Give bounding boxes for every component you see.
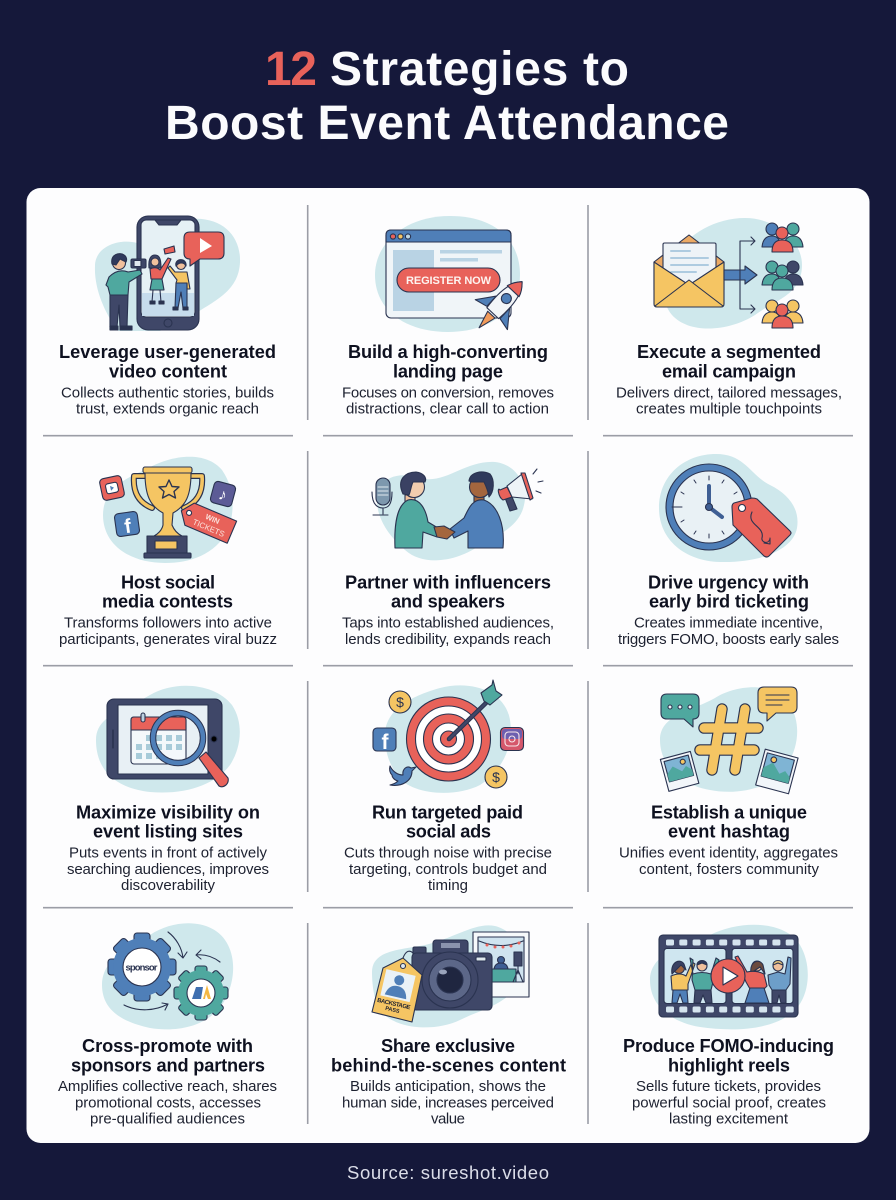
description: Sells future tickets, provides (636, 1078, 821, 1095)
heading (651, 802, 807, 842)
heading (102, 572, 233, 612)
description (342, 615, 554, 648)
icon: sponsor and partner gears: sponsor (126, 962, 158, 974)
description: Unifies event identity, aggregates (619, 845, 838, 862)
description: powerful social proof, creates (632, 1094, 826, 1111)
description: distractions, clear call to action (346, 400, 549, 417)
description (342, 1078, 554, 1127)
heading: Produce FOMO-inducing (623, 1036, 834, 1056)
description: Creates immediate incentive, (634, 615, 823, 632)
icon: hashtag with chat bubbles and photos (660, 687, 798, 794)
heading: Cross-promote with (82, 1036, 253, 1056)
heading: event listing sites (93, 822, 243, 842)
description: Collects authentic stories, builds (61, 384, 274, 401)
panel: behind-the-scenes (331, 925, 566, 1127)
icon: trophy with social tiles and tag: ♪ (217, 486, 229, 505)
description (342, 384, 554, 417)
heading (71, 1036, 265, 1076)
title: 12 (265, 43, 317, 96)
heading (345, 572, 551, 612)
panel: landing page (342, 216, 554, 417)
heading: video content (109, 362, 227, 382)
description: participants, generates viral buzz (59, 631, 277, 648)
icon: phone with creators and play bubble (95, 216, 240, 331)
heading: highlight reels (668, 1056, 790, 1076)
description: Cuts through noise with precise (344, 845, 552, 862)
icon: trophy with social tiles and tag: WIN (204, 512, 221, 526)
heading (76, 802, 260, 842)
heading (637, 342, 821, 382)
description: Delivers direct, tailored messages, (616, 384, 842, 401)
description: promotional costs, accesses (75, 1094, 261, 1111)
title: Strategies to (330, 43, 629, 96)
description: Puts events in front of actively (69, 845, 268, 862)
heading: Partner with influencers (345, 572, 551, 592)
heading: Maximize visibility on (76, 802, 260, 822)
description: triggers FOMO, boosts early sales (618, 631, 839, 648)
left speaker (395, 472, 438, 548)
description: lends credibility, expands reach (345, 631, 551, 648)
description: discoverability (121, 877, 216, 894)
icon: trophy with social tiles and tag (99, 457, 237, 563)
heading: Leverage user-generated (59, 342, 276, 362)
description: Transforms followers into active (64, 615, 272, 632)
icon: browser with register button and rocket (375, 216, 538, 343)
description: value (431, 1110, 465, 1127)
panel: highlight reels (623, 925, 834, 1127)
icon: camera, backstage pass and photo: BACKSTAGE (376, 998, 411, 1011)
heading: email campaign (662, 362, 796, 382)
right speaker (450, 472, 503, 548)
heading: media contests (102, 592, 233, 612)
heading: behind-the-scenes content (331, 1056, 566, 1076)
title: Boost Event Attendance (165, 97, 729, 150)
description: Focuses on conversion, removes (342, 384, 554, 401)
panel: social contests (59, 457, 277, 648)
description (344, 845, 552, 894)
icon: film strip with crowd and play button (650, 925, 808, 1029)
heading (59, 342, 276, 382)
source credit: Source: sureshot.video (347, 1162, 549, 1183)
icon: camera, backstage pass and photo (372, 925, 529, 1027)
description: trust, extends organic reach (76, 400, 259, 417)
icon: tablet calendar with magnifier (96, 686, 240, 793)
description: Taps into established audiences, (342, 615, 554, 632)
heading: Host social (121, 572, 215, 592)
description (61, 384, 274, 417)
heading: landing page (393, 362, 503, 382)
description (59, 615, 277, 648)
icon: trophy with social tiles and tag: f (123, 515, 133, 538)
description: timing (428, 877, 468, 894)
heading: social ads (406, 822, 491, 842)
heading (648, 572, 809, 612)
icon: camera, backstage pass and photo: PASS (384, 1006, 400, 1015)
icon: trophy with social tiles and tag: TICKETS (191, 517, 226, 539)
heading: Execute a segmented (637, 342, 821, 362)
description: pre-qualified audiences (90, 1110, 245, 1127)
heading: Run targeted paid (372, 802, 523, 822)
description: lasting excitement (669, 1110, 789, 1127)
icon: browser with register button and rocket: REGISTER NOW (406, 275, 492, 287)
heading: sponsors and partners (71, 1056, 265, 1076)
boy (168, 260, 190, 310)
icon: target with arrow, coins and social tiles: $ (492, 769, 500, 785)
title (165, 43, 729, 150)
audience groups (762, 223, 803, 328)
white panel background (26, 188, 870, 1143)
description: targeting, controls budget and (349, 861, 547, 878)
woman (149, 246, 175, 304)
description (58, 1078, 277, 1127)
description (67, 845, 269, 894)
panel: early bird (618, 454, 839, 648)
description (632, 1078, 826, 1127)
heading: Build a high-converting (348, 342, 548, 362)
heading: Drive urgency with (648, 572, 809, 592)
icon: handshake between speakers with mic and megaphone (372, 462, 543, 560)
description: Amplifies collective reach, shares (58, 1078, 277, 1095)
description (618, 615, 839, 648)
description (616, 384, 842, 417)
icon: target with arrow, coins and social tiles (373, 680, 524, 793)
icon: clock and price tag (659, 454, 798, 562)
panel: paid social ads (344, 680, 552, 894)
description: human side, increases perceived (342, 1094, 554, 1111)
heading: Share exclusive (381, 1036, 515, 1056)
icon: envelope sending to audience groups (654, 218, 803, 329)
man filming (106, 254, 146, 330)
description: Builds anticipation, shows the (350, 1078, 546, 1095)
panel: sponsors and partners (58, 923, 277, 1127)
icon: target with arrow, coins and social tiles: $ (396, 694, 404, 710)
icon: sponsor and partner gears (102, 923, 233, 1029)
heading (348, 342, 548, 382)
heading: event hashtag (668, 822, 790, 842)
panel: influencers and speakers (342, 462, 554, 648)
description: creates multiple touchpoints (636, 400, 822, 417)
heading: and speakers (391, 592, 505, 612)
description: searching audiences, improves (67, 861, 269, 878)
heading: Establish a unique (651, 802, 807, 822)
heading (372, 802, 523, 842)
icon: target with arrow, coins and social tiles: f (382, 731, 390, 754)
panel: segmented email (616, 218, 842, 417)
heading (623, 1036, 834, 1076)
heading: early bird ticketing (649, 592, 809, 612)
panel: event listing sites (67, 686, 269, 894)
panel: user-generated video (59, 216, 276, 417)
description (619, 845, 838, 878)
panel: event hashtag (619, 687, 838, 878)
description: content, fosters community (639, 861, 820, 878)
heading (331, 1036, 566, 1076)
